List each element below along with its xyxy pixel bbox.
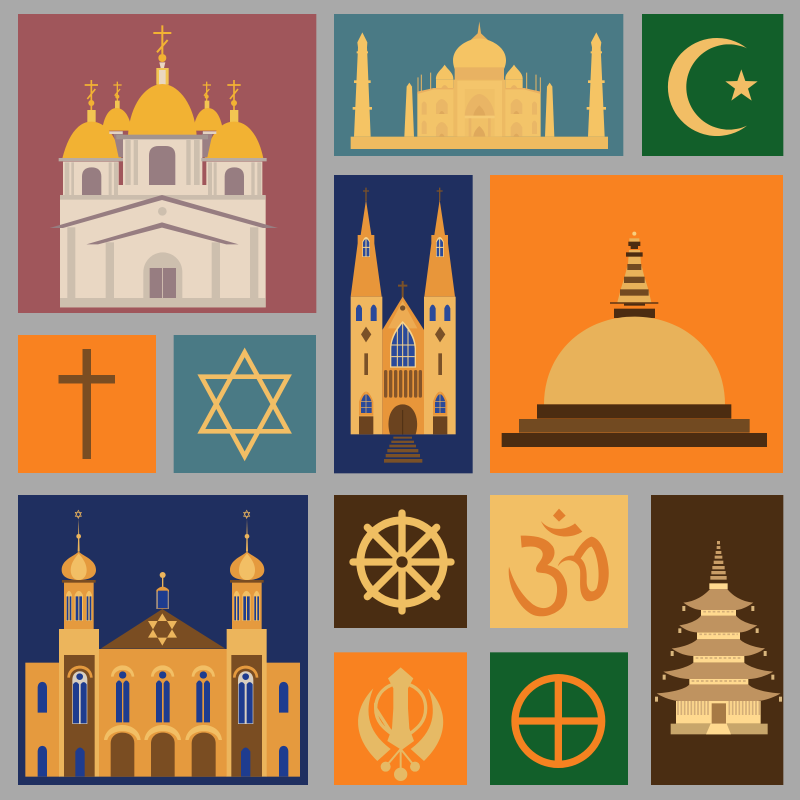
icon: cross (58, 349, 115, 459)
icon: stupa steps (502, 404, 767, 447)
icon: left tower (59, 510, 99, 777)
icon: circled cross (515, 678, 602, 764)
cathedral nave front (382, 297, 424, 434)
panel: christian cross (18, 335, 156, 473)
side wings (25, 663, 300, 777)
icon: tower crosses (363, 188, 443, 298)
icon: wheel (353, 513, 451, 611)
icon: hall windows (111, 665, 215, 722)
icon: tower windows (356, 305, 450, 434)
panel: om (490, 495, 628, 628)
pagoda ground floor (676, 701, 761, 724)
icon: wing windows (38, 682, 288, 777)
icon: star (725, 69, 758, 101)
icon: hall doors (104, 725, 222, 777)
icon: rose window (388, 301, 417, 368)
panel: stupa (490, 175, 783, 473)
central hall (99, 649, 227, 777)
icon: outer minarets (353, 32, 606, 137)
icon: hexagram (201, 352, 288, 456)
tracery (384, 370, 422, 398)
panel: crescent and star (642, 14, 783, 156)
upper drum (109, 131, 216, 196)
panel: orthodox church (18, 14, 316, 313)
icon: stupa dome (544, 317, 725, 404)
lower church body (50, 195, 278, 307)
icon: khanda symbol (358, 667, 443, 781)
cathedral towers (351, 297, 456, 434)
mausoleum body (417, 80, 541, 137)
platform (351, 137, 608, 149)
icon: thin spires (418, 73, 540, 92)
icon: golden domes (62, 84, 263, 158)
icon: small domes (436, 65, 523, 89)
panel: star of david (174, 335, 316, 473)
icon: gable roof with star (101, 609, 225, 649)
panel: pagoda (651, 495, 783, 785)
pagoda base and steps (671, 724, 768, 734)
panel: taj mahal (334, 14, 623, 156)
icon: main cross (153, 25, 171, 85)
icon: crescent (668, 38, 747, 136)
icon: central turret (156, 572, 169, 609)
icon: spires (351, 200, 455, 297)
icon: side crosses (85, 80, 241, 122)
icon: right tower (227, 510, 267, 777)
panel: khanda (334, 652, 467, 785)
icon: stairs (384, 437, 422, 463)
panel: dharma wheel (334, 495, 467, 628)
icon: cream storeys (689, 610, 748, 685)
icon: om symbol (509, 509, 609, 616)
icon: stupa spire (610, 232, 658, 318)
panel: sun cross (490, 652, 628, 785)
side towers (59, 158, 267, 196)
icon: pagoda spire (709, 541, 728, 589)
panel: synagogue (18, 495, 308, 785)
icon: pagoda roofs (657, 589, 781, 701)
panel: gothic cathedral (334, 175, 473, 473)
icon: roof bells (655, 606, 782, 702)
church door (143, 252, 182, 298)
icon: main dome (453, 21, 506, 81)
mausoleum side arches (422, 99, 537, 137)
icon: inner minarets (404, 83, 554, 137)
icon: cathedral door (388, 404, 417, 434)
